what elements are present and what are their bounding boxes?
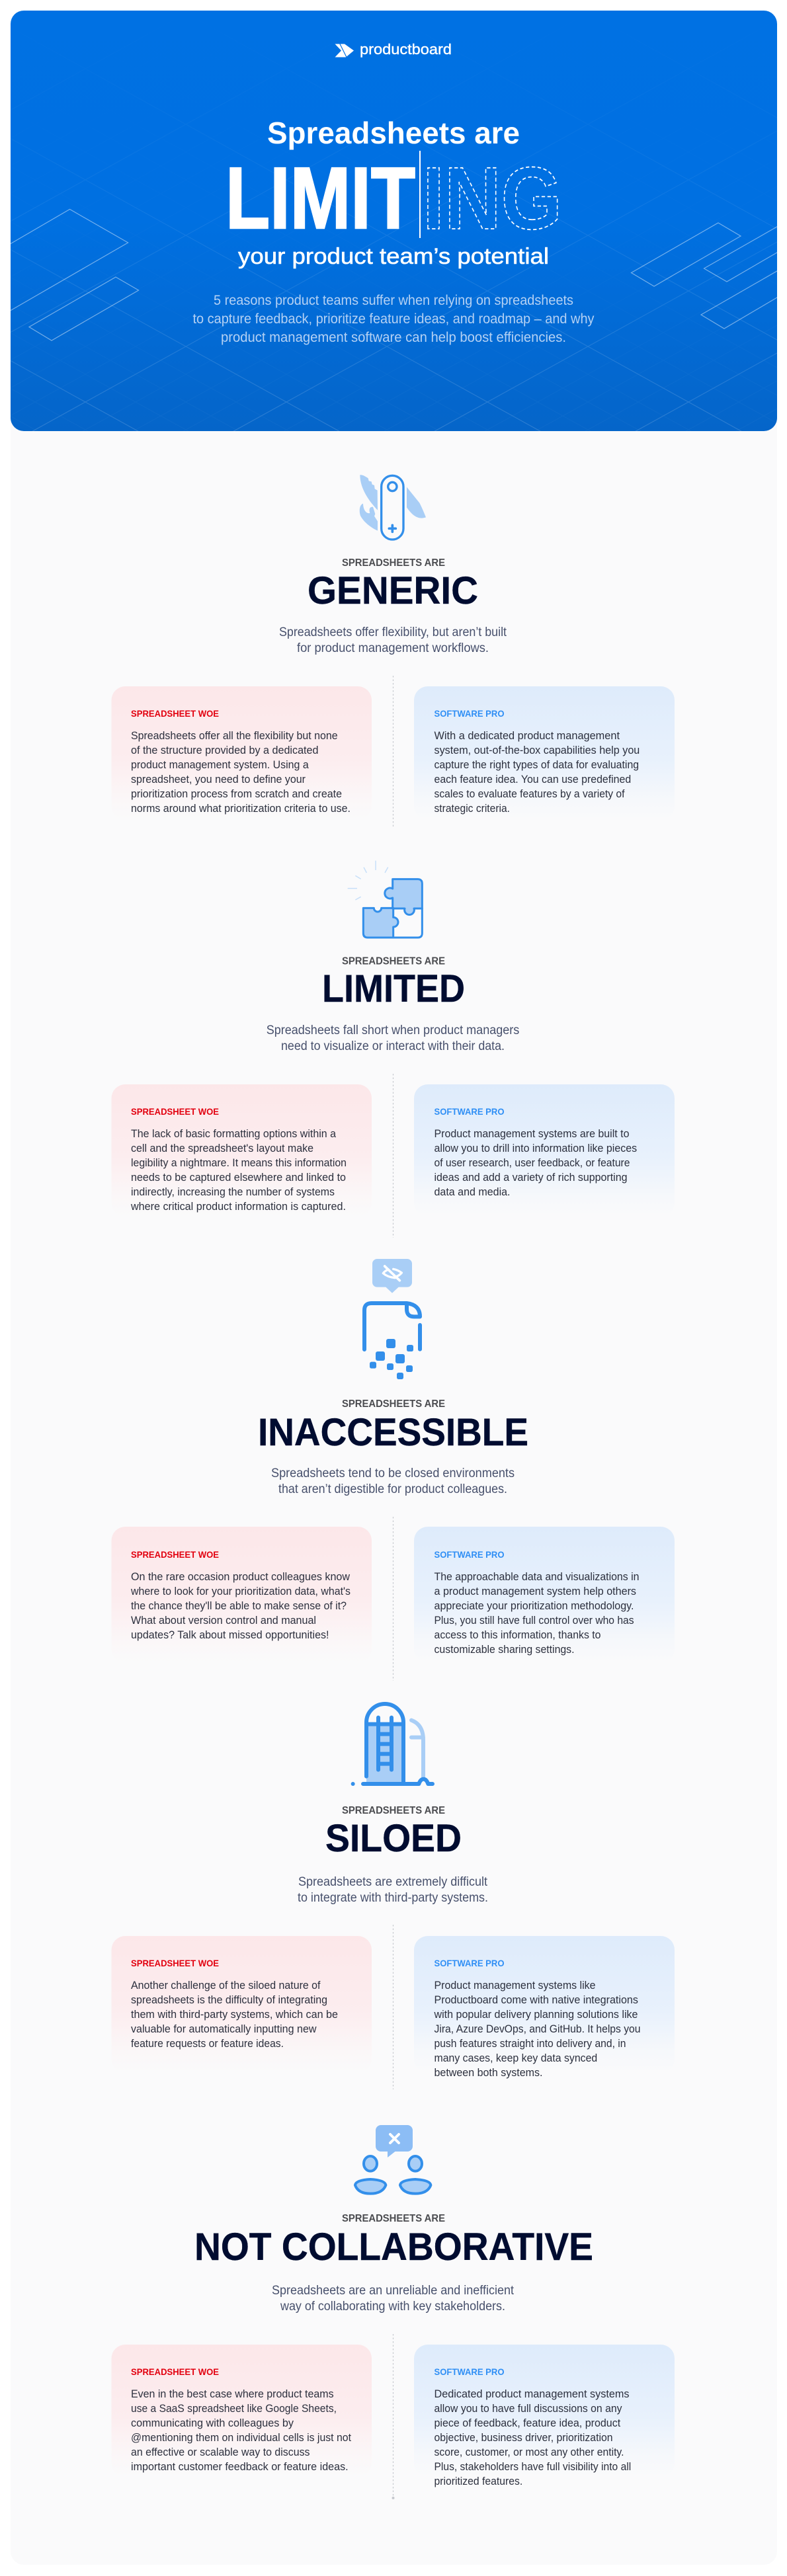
card: inaccessible software pro: access to this information, thanks to — [434, 1629, 601, 1641]
text: generic summary: for product management workflows. — [297, 641, 489, 655]
card: limited software pro: of user research, user feedback, or feature — [434, 1156, 630, 1169]
card: siloed software pro — [414, 1936, 675, 2079]
panel: not collaborative section — [111, 2125, 675, 2499]
text: limited summary: need to visualize or interact with their data. — [281, 1039, 505, 1053]
card: generic software pro: With a dedicated product management — [434, 729, 620, 742]
text: siloed summary: to integrate with third-party systems. — [298, 1891, 488, 1905]
card: generic software pro: scales to evaluate features by a variety of — [434, 787, 625, 800]
card: inaccessible software pro — [414, 1527, 675, 1663]
title: Spreadsheets are LIMITING: LIMIT — [226, 149, 415, 247]
text: not collaborative summary: Spreadsheets are an unreliable and inefficient — [272, 2284, 515, 2298]
panel: generic section — [111, 475, 675, 826]
card: generic spreadsheet woe: product management system. Using a — [131, 758, 309, 771]
card: not collaborative software pro: prioritized features. — [434, 2475, 522, 2487]
card: not collaborative software pro: piece of feedback, feature idea, product — [434, 2417, 620, 2429]
card: inaccessible spreadsheet woe: What about version control and manual — [131, 1614, 316, 1627]
text: generic summary: Spreadsheets offer flexibility, but aren’t built — [279, 625, 507, 639]
card: not collaborative spreadsheet woe: communicating with colleagues by — [131, 2417, 294, 2429]
card: generic software pro — [414, 686, 675, 820]
card: limited spreadsheet woe: where critical product information is captured. — [130, 1200, 346, 1213]
heading: siloed: SPREADSHEETS ARE — [342, 1805, 445, 1816]
heading: generic: GENERIC — [308, 569, 478, 612]
card: siloed software pro: many cases, keep key data synced — [434, 2052, 597, 2064]
card: limited spreadsheet woe: needs to be captured elsewhere and linked to — [131, 1171, 346, 1184]
card: generic software pro: capture the right types of data for evaluating — [434, 758, 639, 771]
title: Spreadsheets are LIMITING — [226, 116, 562, 269]
card: generic software pro: each feature idea. You can use predefined — [434, 773, 631, 785]
card: limited software pro — [414, 1084, 675, 1217]
title: Spreadsheets are LIMITING: Spreadsheets are — [267, 116, 520, 150]
card: generic software pro: SOFTWARE PRO — [434, 708, 505, 719]
card: inaccessible spreadsheet woe: On the rare occasion product colleagues know — [131, 1570, 351, 1583]
text: limited summary: Spreadsheets fall short when product managers — [267, 1024, 519, 1037]
panel: siloed section — [111, 1704, 675, 2089]
card: inaccessible spreadsheet woe: where to look for your prioritization data, what's — [130, 1585, 351, 1597]
card: limited software pro: allow you to drill into information like pieces — [434, 1142, 637, 1154]
card: siloed software pro: Jira, Azure DevOps, and GitHub. It helps you — [434, 2023, 640, 2035]
card: limited spreadsheet woe: legibility a nightmare. It means this information — [131, 1156, 347, 1169]
icon: silo — [351, 1704, 433, 1786]
card: siloed software pro: with popular delivery planning solutions like — [434, 2008, 638, 2021]
card: siloed spreadsheet woe: spreadsheets is the difficulty of integrating — [131, 1993, 327, 2006]
card: not collaborative spreadsheet woe: Even in the best case where product teams — [131, 2388, 334, 2400]
panel: hero banner — [7, 11, 780, 431]
text: limited summary — [267, 1024, 519, 1053]
card: not collaborative software pro: SOFTWARE PRO — [434, 2366, 505, 2377]
panel: inaccessible section — [111, 1259, 675, 1681]
card: generic spreadsheet woe: prioritization process from scratch and create — [131, 787, 342, 800]
card: inaccessible spreadsheet woe: SPREADSHEET WOE — [131, 1549, 219, 1560]
card: limited spreadsheet woe — [111, 1084, 372, 1217]
logo: productboard: productboard — [360, 41, 452, 58]
card: limited software pro: SOFTWARE PRO — [434, 1106, 505, 1117]
card: siloed spreadsheet woe: valuable for automatically inputting new — [131, 2023, 317, 2035]
card: siloed software pro: Productboard come with native integrations — [434, 1993, 638, 2006]
card: siloed spreadsheet woe: Another challenge of the siloed nature of — [131, 1979, 321, 1992]
text: siloed summary — [298, 1875, 488, 1905]
card: siloed spreadsheet woe — [111, 1936, 372, 2073]
card: generic spreadsheet woe: SPREADSHEET WOE — [131, 708, 219, 719]
card: limited software pro: data and media. — [434, 1186, 511, 1198]
heading: siloed: SILOED — [325, 1817, 462, 1860]
card: generic spreadsheet woe: Spreadsheets offer all the flexibility but none — [131, 729, 338, 742]
card: not collaborative spreadsheet woe: SPREADSHEET WOE — [131, 2366, 219, 2377]
title: Spreadsheets are LIMITING: your product team’s potential — [238, 244, 549, 269]
card: generic spreadsheet woe — [111, 686, 372, 820]
icon: pocket knife — [360, 475, 426, 540]
heading: limited: SPREADSHEETS ARE — [342, 956, 445, 967]
card: inaccessible software pro: a product management system help others — [434, 1585, 636, 1597]
heading: not collaborative: NOT COLLABORATIVE — [194, 2226, 593, 2269]
heading: limited: LIMITED — [322, 967, 465, 1010]
heading: not collaborative: SPREADSHEETS ARE — [342, 2213, 445, 2224]
card: limited spreadsheet woe: indirectly, increasing the number of systems — [131, 1186, 335, 1198]
text: generic summary — [279, 625, 507, 655]
icon: two people with blocked speech bubble — [355, 2125, 431, 2194]
card: generic spreadsheet woe: spreadsheet, you need to define your — [131, 773, 306, 785]
title: Spreadsheets are LIMITING: ING — [423, 149, 562, 248]
card: inaccessible software pro: Plus, you still have full control over who has — [434, 1614, 634, 1627]
card: inaccessible spreadsheet woe: the chance they'll be able to make sense of it? — [131, 1599, 347, 1612]
card: not collaborative software pro: Dedicated product management systems — [434, 2388, 630, 2400]
card: inaccessible software pro: The approachable data and visualizations in — [434, 1570, 639, 1583]
card: siloed software pro: Product management systems like — [434, 1979, 595, 1992]
hero intro text — [193, 293, 595, 345]
card: siloed software pro: between both systems. — [434, 2066, 542, 2079]
text: inaccessible summary — [271, 1467, 515, 1496]
hero intro text: 5 reasons product teams suffer when relying on spreadsheets — [214, 293, 573, 308]
icon: crumbling file with hidden eye bubble — [364, 1259, 420, 1379]
card: not collaborative software pro — [414, 2345, 675, 2487]
icon: puzzle pieces — [348, 861, 422, 938]
text: siloed summary: Spreadsheets are extremely difficult — [298, 1875, 488, 1889]
card: limited software pro: Product management systems are built to — [434, 1127, 630, 1140]
card: siloed spreadsheet woe: SPREADSHEET WOE — [131, 1958, 219, 1968]
text: not collaborative summary — [272, 2284, 515, 2314]
hero intro text: product management software can help boost efficiencies. — [221, 330, 566, 345]
heading: generic: SPREADSHEETS ARE — [342, 557, 445, 569]
card: not collaborative spreadsheet woe: important customer feedback or feature ideas. — [131, 2460, 349, 2473]
card: limited spreadsheet woe: cell and the spreadsheet's layout make — [131, 1142, 313, 1154]
card: not collaborative software pro: allow you to have full discussions on any — [434, 2402, 622, 2415]
card: generic spreadsheet woe: of the structure provided by a dedicated — [131, 744, 319, 756]
card: not collaborative spreadsheet woe: @mentioning them on individual cells is just not — [131, 2431, 351, 2444]
card: inaccessible software pro: appreciate your prioritization methodology. — [434, 1599, 634, 1612]
card: siloed software pro: SOFTWARE PRO — [434, 1958, 505, 1968]
heading: inaccessible: INACCESSIBLE — [258, 1411, 528, 1454]
card: inaccessible spreadsheet woe — [111, 1527, 372, 1663]
text: inaccessible summary: that aren’t digestible for product colleagues. — [278, 1482, 507, 1496]
panel: limited section — [111, 861, 675, 1238]
card: siloed spreadsheet woe: them with third-party systems, which can be — [131, 2008, 338, 2021]
card: not collaborative spreadsheet woe: use a SaaS spreadsheet like Google Sheets, — [131, 2402, 337, 2415]
card: not collaborative software pro: Plus, stakeholders have full visibility into all — [434, 2460, 631, 2473]
text: not collaborative summary: way of collaborating with key stakeholders. — [280, 2300, 505, 2314]
card: limited spreadsheet woe: SPREADSHEET WOE — [131, 1106, 219, 1117]
card: inaccessible software pro: customizable sharing settings. — [434, 1643, 574, 1656]
card: generic spreadsheet woe: norms around what prioritization criteria to use. — [131, 802, 351, 815]
card: inaccessible software pro: SOFTWARE PRO — [434, 1549, 505, 1560]
card: siloed spreadsheet woe: feature requests or feature ideas. — [131, 2037, 284, 2050]
card: generic software pro: strategic criteria. — [434, 802, 510, 815]
card: not collaborative spreadsheet woe: an effective or scalable way to discuss — [131, 2446, 310, 2458]
card: not collaborative spreadsheet woe — [111, 2345, 372, 2477]
card: inaccessible spreadsheet woe: updates? Talk about missed opportunities! — [131, 1629, 329, 1641]
card: limited spreadsheet woe: The lack of basic formatting options within a — [131, 1127, 337, 1140]
card: limited software pro: ideas and add a variety of rich supporting — [434, 1171, 627, 1184]
card: not collaborative software pro: objective, business driver, prioritization — [434, 2431, 612, 2444]
hero intro text: to capture feedback, prioritize feature ideas, and roadmap – and why — [193, 311, 595, 327]
text: inaccessible summary: Spreadsheets tend to be closed environments — [271, 1467, 515, 1480]
card: siloed software pro: push features straight into delivery and, in — [434, 2037, 626, 2050]
heading: inaccessible: SPREADSHEETS ARE — [342, 1398, 445, 1410]
card: not collaborative software pro: score, customer, or most any other entity. — [434, 2446, 624, 2458]
card: generic software pro: system, out-of-the-box capabilities help you — [434, 744, 640, 756]
